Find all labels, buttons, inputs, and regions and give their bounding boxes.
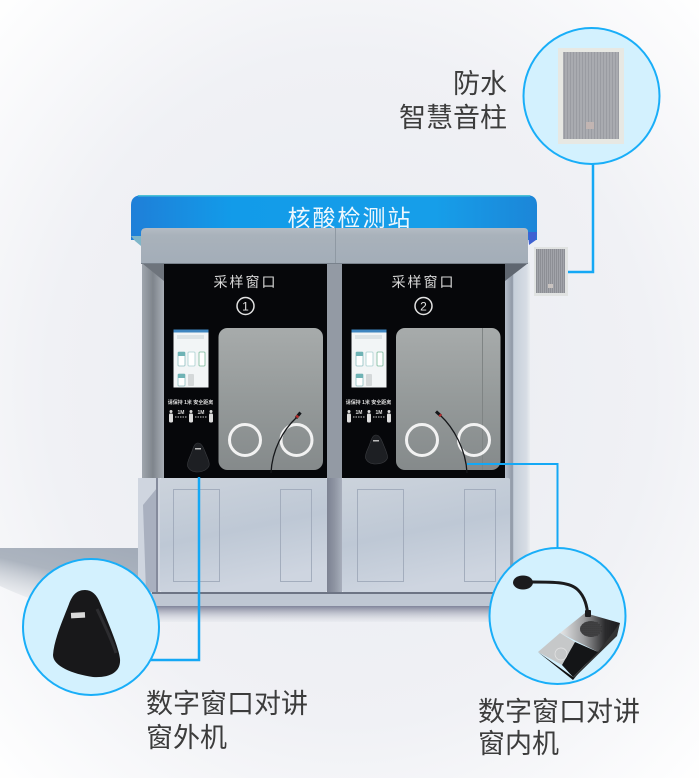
window panel 2 bbox=[342, 264, 505, 478]
label: speaker: 防水 bbox=[453, 69, 507, 99]
canopy bbox=[141, 228, 528, 264]
label: indoor intercom: 窗内机 bbox=[478, 729, 559, 759]
distance notice: 1M bbox=[198, 410, 204, 416]
glove ports bbox=[230, 424, 312, 456]
lower cabinet 2 bbox=[342, 478, 510, 592]
black panel bbox=[342, 264, 505, 478]
kiosk booth bbox=[131, 195, 537, 622]
label: outdoor intercom bbox=[146, 689, 308, 753]
base platform bbox=[150, 592, 530, 622]
callout: indoor intercom bbox=[490, 548, 626, 684]
distance notice bbox=[168, 399, 213, 422]
label: indoor intercom: 数字窗口对讲 bbox=[478, 697, 640, 727]
blue roof bbox=[131, 195, 537, 246]
black panel bbox=[164, 264, 327, 478]
window number: 1 bbox=[242, 300, 249, 314]
outdoor intercom small bbox=[365, 435, 388, 464]
label: speaker: 智慧音柱 bbox=[399, 103, 507, 133]
wall speaker small bbox=[534, 247, 568, 296]
ground shadow bbox=[0, 548, 145, 612]
label: outdoor intercom: 数字窗口对讲 bbox=[146, 689, 308, 719]
window panel 1 bbox=[164, 264, 327, 478]
window number bbox=[237, 298, 254, 314]
panel heading: 采样窗口 bbox=[392, 274, 456, 290]
callout: speaker bbox=[524, 28, 660, 164]
label: outdoor intercom: 窗外机 bbox=[146, 723, 227, 753]
booth body side posts bbox=[138, 262, 530, 594]
lower cabinet 1 bbox=[160, 478, 327, 592]
distance notice: 请保持 1米 安全距离 bbox=[168, 399, 213, 406]
panel heading: 采样窗口 bbox=[214, 274, 278, 290]
icon: column speaker bbox=[558, 48, 624, 144]
glove ports bbox=[406, 424, 490, 456]
callout: outdoor intercom bbox=[23, 559, 159, 695]
window number bbox=[415, 298, 432, 314]
connector: indoor intercom bbox=[467, 464, 558, 548]
icon: desktop microphone bbox=[513, 576, 620, 680]
distance notice: 请保持 1米 安全距离 bbox=[346, 399, 391, 406]
connector: speaker bbox=[568, 164, 593, 272]
microphone bbox=[436, 412, 467, 473]
distance notice bbox=[346, 399, 391, 422]
distance notice: 1M bbox=[178, 410, 184, 416]
glass window bbox=[396, 328, 500, 470]
roof label: 核酸检测站 bbox=[288, 205, 412, 231]
connector: outdoor intercom bbox=[150, 477, 199, 660]
touch screen bbox=[174, 330, 208, 388]
label: indoor intercom bbox=[478, 697, 640, 759]
microphone bbox=[271, 412, 300, 473]
distance notice: 1M bbox=[356, 410, 362, 416]
window number: 2 bbox=[420, 300, 427, 314]
touch screen bbox=[352, 330, 386, 388]
glass window bbox=[218, 328, 323, 470]
icon: triangular intercom bbox=[53, 590, 120, 677]
label: speaker bbox=[399, 69, 507, 133]
distance notice: 1M bbox=[376, 410, 382, 416]
outdoor intercom small bbox=[187, 443, 209, 472]
